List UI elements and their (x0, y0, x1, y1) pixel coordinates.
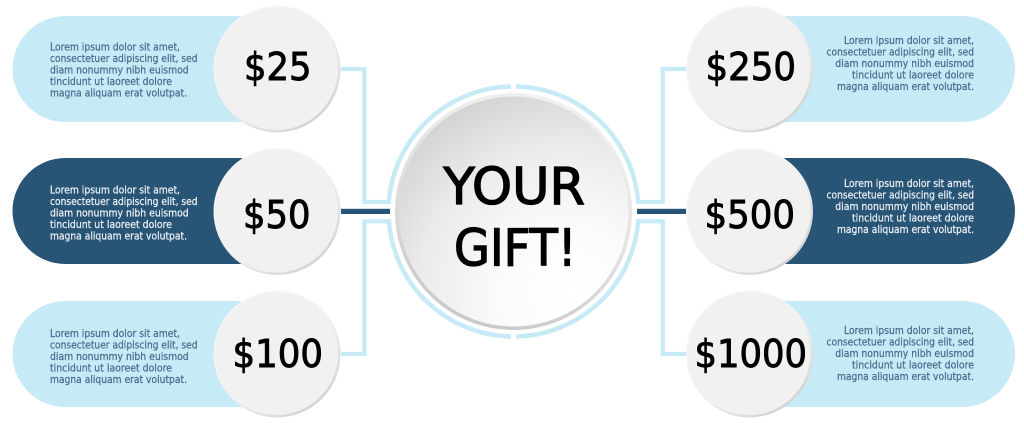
text block: Lorem ipsum dolor sit amet, (50, 327, 180, 340)
text block: magna aliquam erat volutpat. (837, 370, 974, 383)
amount circle (686, 290, 813, 418)
text block: tincidunt ut laoreet dolore (852, 358, 974, 372)
amount circle: $100 (232, 332, 323, 376)
center circle (395, 93, 632, 330)
text block: consectetuer adipiscing elit, sed (826, 188, 974, 202)
text block: tincidunt ut laoreet dolore (50, 218, 172, 231)
text block: tincidunt ut laoreet dolore (50, 362, 172, 374)
text block: Lorem ipsum dolor sit amet, (844, 177, 974, 190)
text block: magna aliquam erat volutpat. (837, 223, 974, 236)
text block (826, 177, 974, 236)
panel: $50 (12, 148, 340, 275)
text block: magna aliquam erat volutpat. (837, 80, 974, 93)
text block: tincidunt ut laoreet dolore (852, 212, 974, 224)
text block: diam nonummy nibh euismod (50, 64, 189, 76)
amount circle: $25 (244, 45, 312, 89)
center title: YOUR (442, 157, 585, 216)
connector: left top bracket (341, 69, 390, 202)
text block: Lorem ipsum dolor sit amet, (844, 324, 974, 337)
text block: consectetuer adipiscing elit, sed (50, 195, 198, 208)
amount circle (686, 148, 813, 275)
text block: Lorem ipsum dolor sit amet, (844, 34, 974, 47)
connector: right bottom bracket (637, 221, 686, 354)
text block: tincidunt ut laoreet dolore (852, 68, 974, 82)
amount circle: $250 (706, 45, 796, 89)
text block: diam nonummy nibh euismod (50, 206, 189, 220)
connector: right middle line (637, 209, 686, 214)
amount circle: $500 (704, 193, 795, 237)
text block: diam nonummy nibh euismod (835, 347, 974, 360)
panel: $500 (686, 148, 1015, 275)
text block: Lorem ipsum dolor sit amet, (50, 184, 180, 196)
amount circle: $50 (243, 193, 310, 237)
amount circle (686, 6, 813, 132)
connector: left middle line (341, 209, 390, 214)
text block: tincidunt ut laoreet dolore (50, 75, 172, 88)
text block: Lorem ipsum dolor sit amet, (50, 40, 180, 54)
text block (826, 324, 974, 383)
amount circle: $1000 (694, 332, 807, 376)
panel: $250 (686, 6, 1015, 132)
center ring (389, 86, 638, 336)
text block: consectetuer adipiscing elit, sed (826, 46, 974, 58)
text block: diam nonummy nibh euismod (50, 350, 189, 363)
amount circle (214, 290, 340, 418)
text block: consectetuer adipiscing elit, sed (826, 336, 974, 348)
text block: magna aliquam erat volutpat. (50, 373, 187, 386)
panel: $100 (12, 290, 340, 418)
connector: right top bracket (637, 69, 686, 202)
amount circle (214, 148, 340, 275)
text block (826, 34, 974, 93)
panel: $25 (12, 6, 340, 132)
center title (442, 157, 585, 278)
text block: magna aliquam erat volutpat. (50, 230, 187, 242)
connector: left bottom bracket (341, 221, 390, 354)
text block: consectetuer adipiscing elit, sed (50, 338, 198, 352)
amount circle (214, 6, 340, 132)
text block: magna aliquam erat volutpat. (50, 86, 187, 100)
center title: GIFT! (454, 219, 576, 278)
text block (50, 40, 198, 100)
text block: consectetuer adipiscing elit, sed (50, 52, 198, 65)
panel: $1000 (686, 290, 1015, 418)
text block: diam nonummy nibh euismod (835, 57, 974, 70)
text block (50, 184, 198, 242)
text block: diam nonummy nibh euismod (835, 200, 974, 213)
text block (50, 327, 198, 386)
